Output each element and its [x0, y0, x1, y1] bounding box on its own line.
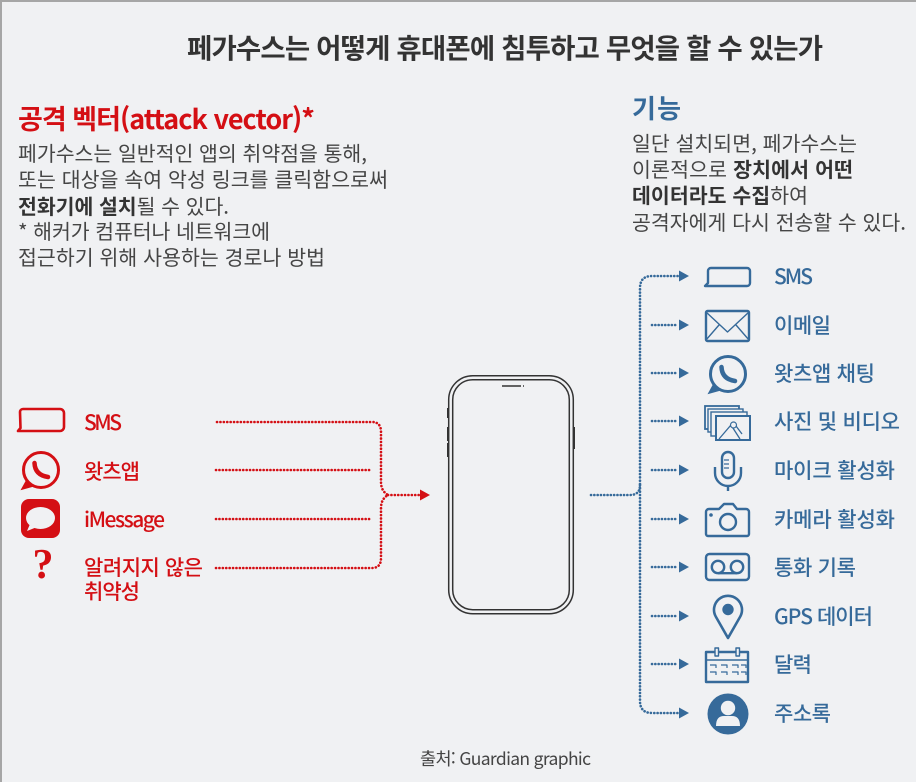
body text: attack vector description: 페가수스는 일반적인 앱의 취약점을 통해, [18, 137, 367, 167]
body text: capabilities description: 공격자에게 다시 전송할 수 있다. [632, 206, 906, 236]
body text: capabilities description: 데이터라도 수집하여 [632, 179, 808, 209]
panel: attack vector text [18, 98, 388, 271]
panel: attack vectors list [18, 407, 203, 606]
heading: attack vector: 공격 벡터(attack vector)* [18, 98, 315, 137]
body text: capabilities description: 이론적으로 장치에서 어떤 [632, 153, 853, 183]
body text: attack vector description: 또는 대상을 속여 악성 링크를 클릭함으로써 [18, 163, 388, 193]
icon: microphone [715, 452, 741, 491]
arrow: blue dotted branch from phone [591, 270, 689, 718]
body text: attack vector description: 전화기에 설치될 수 있다. [18, 190, 229, 220]
body text: attack vector description [18, 137, 388, 271]
icon: contacts [708, 694, 748, 734]
body text: attack vector description: 접근하기 위해 사용하는 경로나 방법 [18, 241, 325, 271]
label: GPS data: GPS 데이터 [774, 601, 873, 631]
body text: capabilities description: 일단 설치되면, 페가수스는 [632, 127, 857, 157]
icon: call log voicemail [706, 554, 749, 580]
label: photos and video: 사진 및 비디오 [774, 406, 900, 436]
icon: camera [706, 504, 749, 536]
label: unknown vulnerability [84, 552, 203, 606]
label: microphone activation: 마이크 활성화 [774, 455, 895, 485]
label: SMS: SMS [84, 407, 122, 437]
icon: WhatsApp [709, 356, 746, 393]
body text: attack vector description: * 해커가 컴퓨터나 네트워크에 [18, 215, 270, 245]
icon: question mark: ? [32, 542, 54, 588]
label: unknown vulnerability: 알려지지 않은 [84, 552, 203, 582]
label: contacts: 주소록 [774, 698, 831, 728]
label: call log: 통화 기록 [774, 552, 856, 582]
label: unknown vulnerability: 취약성 [84, 576, 140, 606]
label: calendar: 달력 [774, 649, 812, 679]
icon: red SMS bubble [18, 409, 64, 431]
panel: capabilities list [705, 261, 900, 734]
body text: capabilities description [632, 127, 906, 236]
panel: capabilities text [632, 89, 906, 236]
label: camera activation: 카메라 활성화 [774, 504, 895, 534]
icon: photos and video [705, 406, 750, 440]
title: 페가수스는 어떻게 휴대폰에 침투하고 무엇을 할 수 있는가 [187, 26, 823, 66]
arrow: red dotted connectors to phone [216, 422, 430, 568]
label: WhatsApp chat: 왓츠앱 채팅 [774, 358, 875, 388]
label: SMS: SMS [774, 261, 813, 291]
icon: smartphone [448, 376, 574, 614]
source credit: 출처: Guardian graphic [420, 746, 591, 771]
icon: red iMessage [21, 499, 60, 538]
icon: SMS bubble [705, 268, 750, 286]
label: email: 이메일 [774, 310, 831, 340]
icon: email [706, 311, 749, 341]
label: iMessage: iMessage [84, 504, 165, 534]
label: WhatsApp: 왓츠앱 [84, 456, 140, 486]
icon: red WhatsApp [22, 452, 58, 489]
heading: capabilities: 기능 [632, 89, 681, 126]
icon: calendar [706, 648, 748, 682]
icon: GPS pin [714, 596, 742, 638]
